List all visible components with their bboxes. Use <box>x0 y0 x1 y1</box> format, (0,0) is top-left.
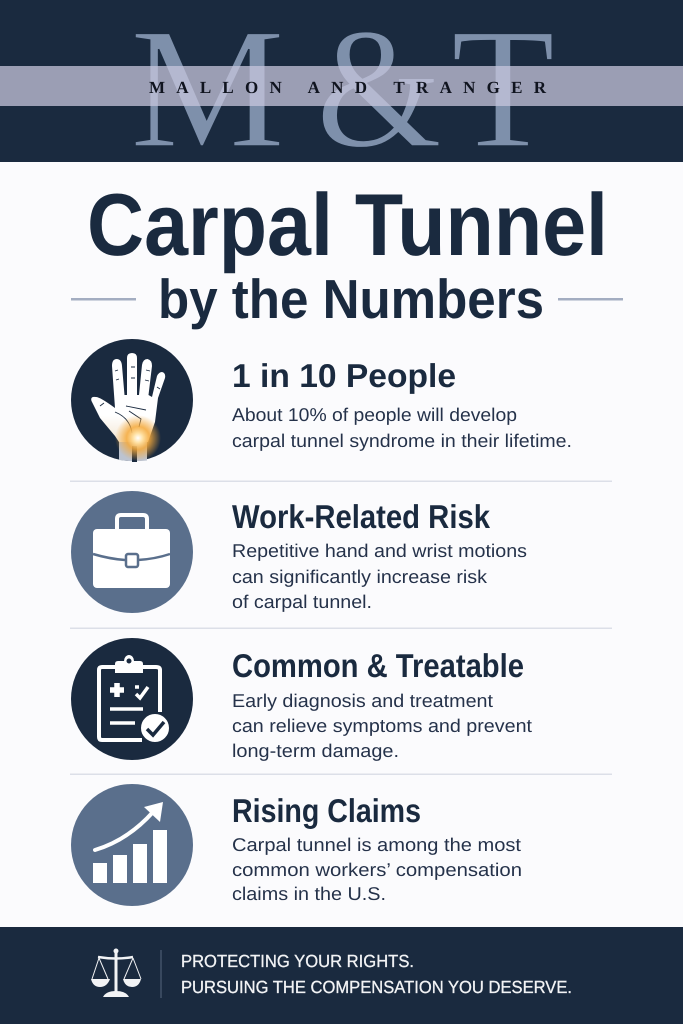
heading: 1 in 10 People <box>232 357 456 394</box>
icon: rising bar chart <box>71 784 193 906</box>
tagline: PROTECTING YOUR RIGHTS. <box>181 951 414 971</box>
description <box>232 834 522 904</box>
item: 1 in 10 people <box>71 339 572 462</box>
header banner <box>0 0 683 184</box>
description: can relieve symptoms and prevent <box>232 715 532 736</box>
description <box>232 540 527 612</box>
heading: Rising Claims <box>232 792 421 829</box>
item: rising claims <box>71 784 522 906</box>
description: of carpal tunnel. <box>232 591 372 612</box>
translucent band <box>0 66 683 106</box>
heading: Work-Related Risk <box>232 498 491 535</box>
description: Early diagnosis and treatment <box>232 690 493 711</box>
description <box>232 404 572 451</box>
heading: Common & Treatable <box>232 647 524 684</box>
icon: hand with glowing wrist <box>71 339 193 462</box>
tagline <box>181 951 572 997</box>
description: About 10% of people will develop <box>232 404 517 425</box>
item: work-related risk <box>71 491 527 613</box>
item: common and treatable <box>71 638 532 761</box>
description: carpal tunnel syndrome in their lifetime. <box>232 430 572 451</box>
monogram M&T <box>130 0 555 184</box>
description: Carpal tunnel is among the most <box>232 834 521 855</box>
description: long-term damage. <box>232 740 399 761</box>
title <box>71 175 623 330</box>
title: Carpal Tunnel <box>87 175 608 274</box>
footer <box>0 927 683 1024</box>
icon: clipboard with check <box>71 638 193 760</box>
icon: briefcase <box>71 491 193 613</box>
icon: scales of justice <box>91 949 141 997</box>
description: can significantly increase risk <box>232 566 488 587</box>
description: common workers’ compensation <box>232 859 522 880</box>
subtitle: by the Numbers <box>158 268 544 330</box>
tagline: PURSUING THE COMPENSATION YOU DESERVE. <box>181 977 572 997</box>
description: claims in the U.S. <box>232 883 386 904</box>
description <box>232 690 532 761</box>
description: Repetitive hand and wrist motions <box>232 540 527 561</box>
firm name: MALLON AND TRANGER <box>149 78 547 97</box>
